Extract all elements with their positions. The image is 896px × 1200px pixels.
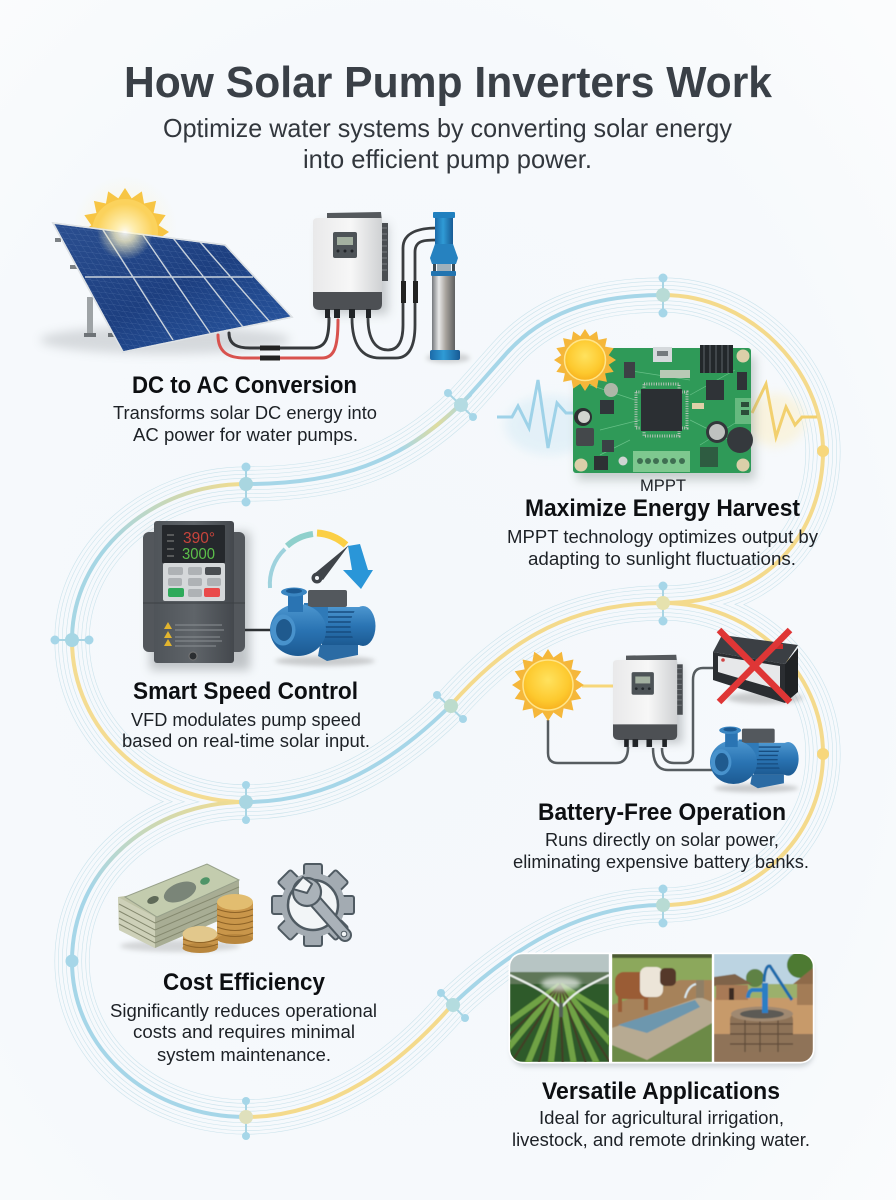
- photo strip: [508, 952, 816, 1069]
- path nodes: [50, 274, 829, 1140]
- icon: sun behind solar panel: [73, 176, 177, 280]
- heading: Maximize Energy Harvest: [525, 495, 800, 522]
- heading: DC to AC Conversion: [132, 372, 357, 399]
- title: How Solar Pump Inverters Work: [124, 58, 773, 107]
- description: eliminating expensive battery banks.: [513, 852, 809, 872]
- icon: cash stack: [118, 864, 240, 952]
- AC cables to pump: [352, 228, 437, 358]
- inverter unit: [313, 212, 388, 318]
- frequency drive unit: [143, 521, 250, 670]
- description: system maintenance.: [157, 1045, 331, 1065]
- battery crossed out: [713, 630, 803, 704]
- inverter unit: [613, 655, 683, 747]
- wiring: [548, 668, 715, 770]
- solar panel array: [40, 204, 292, 354]
- flow path network: [50, 274, 840, 1140]
- water pump: [270, 588, 376, 666]
- description: livestock, and remote drinking water.: [512, 1130, 810, 1150]
- heading: Smart Speed Control: [133, 678, 358, 705]
- cable: [245, 629, 272, 631]
- description: MPPT technology optimizes output by: [507, 527, 818, 547]
- icon: coin stacks: [182, 894, 253, 953]
- submersible pump: [426, 212, 470, 363]
- DC cables: [218, 318, 338, 360]
- panel: smart speed control: [122, 521, 376, 751]
- description: AC power for water pumps.: [133, 425, 358, 445]
- description: [110, 1001, 377, 1065]
- description: Runs directly on solar power,: [545, 830, 779, 850]
- panel: battery-free operation: [512, 630, 809, 872]
- heading: Versatile Applications: [542, 1078, 780, 1105]
- description: adapting to sunlight fluctuations.: [528, 549, 796, 569]
- circuit board: [573, 345, 755, 480]
- photo: livestock trough: [612, 954, 712, 1062]
- description: Significantly reduces operational: [110, 1001, 377, 1021]
- icon: output waveform: [745, 384, 817, 446]
- description: Transforms solar DC energy into: [113, 403, 377, 423]
- description: [512, 1108, 810, 1150]
- icon: gear and wrench: [272, 864, 354, 946]
- icon: sun: [512, 649, 584, 721]
- water pump: [710, 726, 799, 792]
- panel: cost efficiency: [110, 864, 377, 1065]
- photo: village well: [714, 952, 813, 1062]
- frequency drive unit: 390°: [183, 530, 215, 547]
- subtitle: Optimize water systems by converting solar energy: [163, 113, 732, 143]
- panel: maximize energy harvest: [497, 329, 818, 569]
- concentric guide lines: [54, 278, 840, 1134]
- panel: versatile applications: [508, 952, 816, 1150]
- subtitle: into efficient pump power.: [303, 144, 592, 174]
- icon: input waveform: [497, 380, 595, 455]
- description: [122, 710, 370, 751]
- subtitle: [163, 113, 732, 174]
- panel: DC to AC conversion: [40, 176, 470, 445]
- heading: Cost Efficiency: [163, 969, 326, 996]
- description: based on real-time solar input.: [122, 731, 370, 751]
- description: [513, 830, 809, 872]
- description: costs and requires minimal: [133, 1022, 355, 1042]
- red cross: [719, 630, 790, 702]
- main path: blue and yellow segments: [72, 295, 823, 1117]
- description: [113, 403, 377, 445]
- frequency drive unit: 3000: [182, 546, 215, 563]
- description: [507, 527, 818, 569]
- speed gauge with arrow: [270, 533, 373, 589]
- heading: Battery-Free Operation: [538, 799, 786, 826]
- description: VFD modulates pump speed: [131, 710, 361, 730]
- MPPT label: MPPT: [640, 476, 686, 495]
- photo: crop irrigation: [510, 954, 609, 1062]
- icon: sun: [554, 329, 616, 391]
- description: Ideal for agricultural irrigation,: [539, 1108, 784, 1128]
